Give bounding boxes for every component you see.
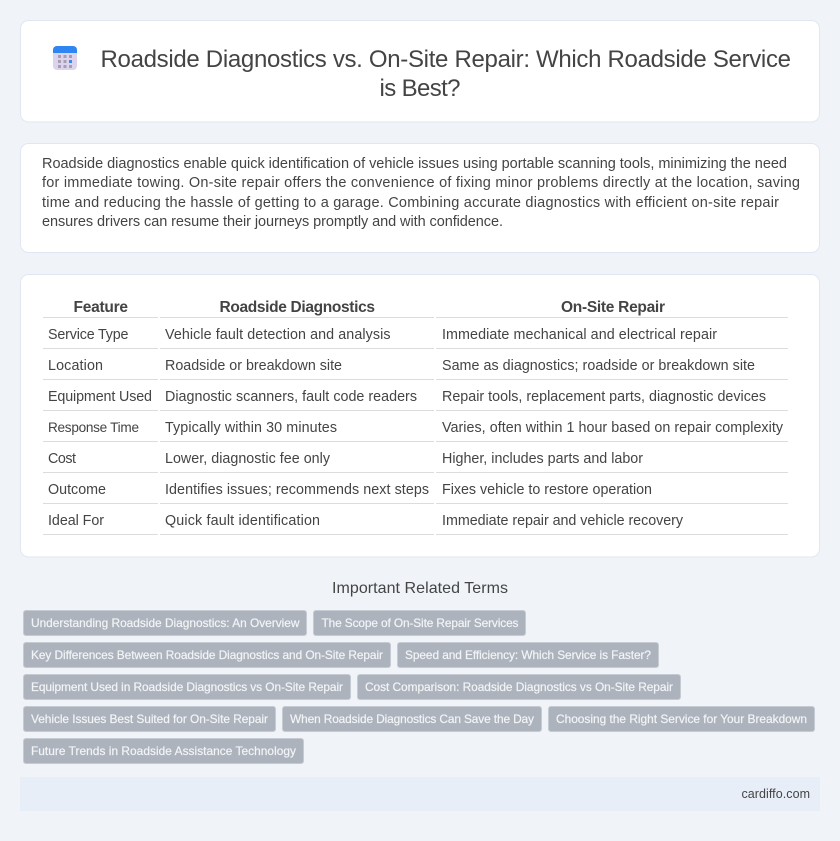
tag bbox=[548, 706, 814, 732]
tag bbox=[398, 642, 658, 668]
row: outcome bbox=[48, 482, 652, 498]
tag bbox=[314, 610, 526, 636]
row: ideal for: Ideal For bbox=[48, 513, 104, 529]
tag: The Scope of On-Site Repair Services bbox=[322, 616, 519, 630]
row: outcome: Outcome bbox=[48, 482, 106, 498]
row: equipment used: Diagnostic scanners, fault code readers bbox=[165, 389, 417, 405]
row: ideal for: Immediate repair and vehicle recovery bbox=[442, 513, 684, 529]
tag bbox=[24, 674, 350, 700]
tag bbox=[24, 610, 306, 636]
row: service type: Service Type bbox=[48, 327, 129, 343]
tag bbox=[24, 738, 304, 764]
table header: Feature bbox=[74, 299, 128, 316]
title bbox=[100, 46, 791, 102]
tag: Speed and Efficiency: Which Service is Faster? bbox=[405, 648, 651, 662]
tag: Choosing the Right Service for Your Breakdown bbox=[556, 712, 807, 726]
tag: Equipment Used in Roadside Diagnostics vs On-Site Repair bbox=[31, 680, 343, 694]
header panel bbox=[20, 20, 820, 122]
tag bbox=[24, 642, 390, 668]
row: response time: Response Time bbox=[48, 420, 139, 435]
title: Roadside Diagnostics vs. On-Site Repair: Which Roadside Service bbox=[100, 46, 791, 73]
row: cost bbox=[48, 451, 643, 467]
row: outcome: Identifies issues; recommends next steps bbox=[165, 482, 429, 498]
tag: Future Trends in Roadside Assistance Technology bbox=[31, 744, 296, 758]
row: outcome: Fixes vehicle to restore operation bbox=[442, 482, 652, 498]
intro paragraph: Roadside diagnostics enable quick identification of vehicle issues using portable scanning tools, minimizing the need bbox=[42, 156, 787, 172]
row: ideal for: Quick fault identification bbox=[165, 513, 320, 529]
table header: On-Site Repair bbox=[561, 299, 665, 316]
icon: calendar bbox=[53, 46, 77, 70]
tag: When Roadside Diagnostics Can Save the Day bbox=[290, 712, 534, 726]
row: cost: Cost bbox=[48, 451, 76, 467]
tag: Vehicle Issues Best Suited for On-Site Repair bbox=[31, 712, 268, 726]
tag bbox=[24, 706, 276, 732]
table header: Roadside Diagnostics bbox=[220, 299, 375, 316]
footer: cardiffo.com bbox=[742, 787, 810, 801]
row: equipment used bbox=[48, 389, 766, 405]
row: location bbox=[48, 358, 755, 374]
panel: introduction text bbox=[20, 144, 820, 252]
row: service type: Vehicle fault detection and analysis bbox=[165, 327, 390, 343]
footer bbox=[20, 777, 820, 811]
panel: comparison table bbox=[20, 274, 820, 557]
tag bbox=[358, 674, 680, 700]
row: service type: Immediate mechanical and electrical repair bbox=[442, 327, 717, 343]
row: equipment used: Repair tools, replacement parts, diagnostic devices bbox=[442, 389, 766, 405]
row: response time: Varies, often within 1 hour based on repair complexity bbox=[442, 420, 784, 436]
row: ideal for bbox=[48, 513, 684, 529]
related term tags bbox=[24, 610, 814, 764]
heading: important related terms: Important Related Terms bbox=[332, 580, 508, 597]
intro paragraph: time and reducing the hassle of getting to a garage. Combining accurate diagnostics with efficient on-site repair bbox=[42, 195, 779, 211]
row: response time: Typically within 30 minutes bbox=[165, 420, 337, 436]
tag: Key Differences Between Roadside Diagnostics and On-Site Repair bbox=[31, 648, 383, 662]
intro paragraph bbox=[42, 156, 800, 230]
row: location: Location bbox=[48, 358, 103, 374]
row: cost: Higher, includes parts and labor bbox=[442, 451, 643, 467]
intro paragraph: ensures drivers can resume their journeys promptly and with confidence. bbox=[42, 214, 503, 230]
table header bbox=[74, 299, 665, 316]
row: location: Roadside or breakdown site bbox=[165, 358, 342, 374]
row: equipment used: Equipment Used bbox=[48, 389, 152, 405]
row: cost: Lower, diagnostic fee only bbox=[165, 451, 331, 467]
title: is Best? bbox=[380, 75, 460, 102]
tag bbox=[282, 706, 542, 732]
tag: Cost Comparison: Roadside Diagnostics vs On-Site Repair bbox=[365, 680, 673, 694]
row: service type bbox=[48, 327, 717, 343]
intro paragraph: for immediate towing. On-site repair offers the convenience of fixing minor problems directly at the location, saving bbox=[42, 175, 800, 191]
tag: Understanding Roadside Diagnostics: An Overview bbox=[31, 616, 300, 630]
row: location: Same as diagnostics; roadside or breakdown site bbox=[442, 358, 755, 374]
row: response time bbox=[48, 420, 784, 436]
